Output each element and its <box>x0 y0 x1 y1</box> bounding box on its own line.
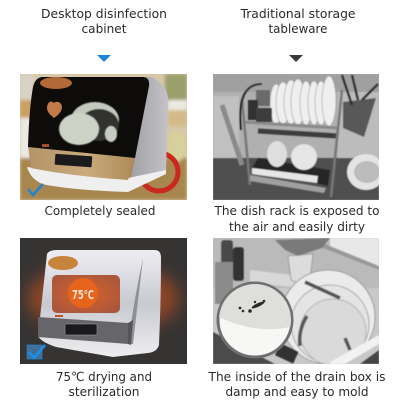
heading: traditional storage tableware: Traditional storage <box>240 6 356 21</box>
caption: drain box mold <box>208 369 386 399</box>
icon: blue down arrow <box>97 55 111 62</box>
rack frame <box>243 122 338 128</box>
icon: blue check box <box>27 345 45 359</box>
panel: sealed cabinet photo <box>20 74 187 200</box>
plates <box>281 270 375 364</box>
icon: red prohibition ring <box>140 153 178 191</box>
plate stack <box>270 76 336 126</box>
bowls <box>267 141 287 167</box>
icon: blue check <box>28 184 43 195</box>
heart badge <box>47 102 62 118</box>
caption: 75C drying and sterilization <box>56 369 152 399</box>
lower tray <box>252 158 330 186</box>
caption: drain box mold: damp and easy to mold <box>226 384 368 399</box>
utensil basket <box>343 98 376 137</box>
orange badge <box>48 256 78 270</box>
vase with plant <box>288 254 313 282</box>
panel: drain box photo <box>213 238 379 365</box>
caption: dish rack exposed: The dish rack is exposed to <box>214 203 380 218</box>
caption: dish rack exposed <box>214 203 380 234</box>
orange badge <box>40 77 72 89</box>
display strip <box>55 154 92 167</box>
caption: 75C drying and sterilization: sterilization <box>68 384 140 399</box>
display <box>65 324 97 335</box>
heading: desktop disinfection cabinet: Desktop disinfection <box>41 6 167 21</box>
bottles <box>220 240 234 263</box>
cabinet base <box>27 167 166 192</box>
heading: traditional storage tableware: tableware <box>268 21 328 36</box>
black door <box>28 77 149 158</box>
cabinet side <box>128 77 168 192</box>
floral decoration <box>300 282 350 350</box>
orange window <box>52 275 120 313</box>
gold control panel <box>28 146 135 180</box>
icon: dark down arrow <box>289 55 303 62</box>
magnifier mold close-up <box>215 283 295 357</box>
tray <box>213 332 275 364</box>
plates <box>59 102 119 145</box>
heading: desktop disinfection cabinet <box>41 6 167 36</box>
caption: completely sealed: Completely sealed <box>44 203 156 218</box>
cabinet body <box>38 250 161 357</box>
panel: 75C drying photo <box>20 238 187 364</box>
caption: drain box mold: The inside of the drain box is <box>208 369 386 384</box>
door edge curve <box>131 258 143 344</box>
caption: dish rack exposed: the air and easily dirty <box>229 219 366 234</box>
colander <box>347 154 385 190</box>
caption: 75C drying and sterilization: 75℃ drying and <box>56 369 152 384</box>
heading: desktop disinfection cabinet: cabinet <box>82 21 127 36</box>
panel: dish rack photo <box>213 74 385 200</box>
grey control band <box>38 317 128 344</box>
temperature label: 75℃ <box>72 288 94 302</box>
heading: traditional storage tableware <box>240 6 356 36</box>
